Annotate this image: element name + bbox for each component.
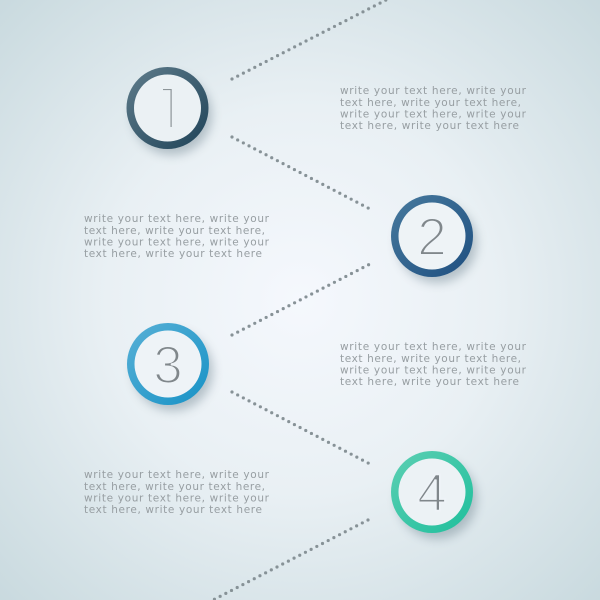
step 1 badge	[126, 67, 212, 155]
text block right lower: write your text here, write your	[340, 364, 527, 376]
text block left upper	[84, 213, 270, 260]
text block left upper: write your text here, write your	[84, 213, 270, 225]
text block left lower: text here, write your text here	[84, 504, 262, 516]
number 2: 2	[417, 208, 447, 267]
text block top right: text here, write your text here	[340, 120, 519, 132]
text block top right: write your text here, write your	[340, 108, 527, 120]
text block right lower: text here, write your text here,	[340, 353, 521, 365]
text block left lower: write your text here, write your	[84, 469, 270, 481]
text block right lower: write your text here, write your	[340, 341, 527, 353]
text block right lower	[340, 341, 527, 388]
text block left upper: text here, write your text here,	[84, 225, 265, 237]
number 1	[163, 89, 172, 127]
step 4 badge	[391, 451, 477, 539]
dotted connector lines	[213, 0, 388, 600]
step 3 badge	[127, 323, 213, 411]
text block left upper: write your text here, write your	[84, 236, 270, 248]
text block left lower	[84, 469, 270, 516]
step 2 badge	[391, 195, 477, 283]
text block top right	[340, 85, 527, 132]
number 3: 3	[153, 336, 183, 395]
text block left upper: text here, write your text here	[84, 248, 262, 260]
text block right lower: text here, write your text here	[340, 376, 519, 388]
text block top right: text here, write your text here,	[340, 97, 521, 109]
text block top right: write your text here, write your	[340, 85, 527, 97]
text block left lower: text here, write your text here,	[84, 481, 265, 493]
text block left lower: write your text here, write your	[84, 492, 270, 504]
number 4: 4	[417, 464, 447, 523]
